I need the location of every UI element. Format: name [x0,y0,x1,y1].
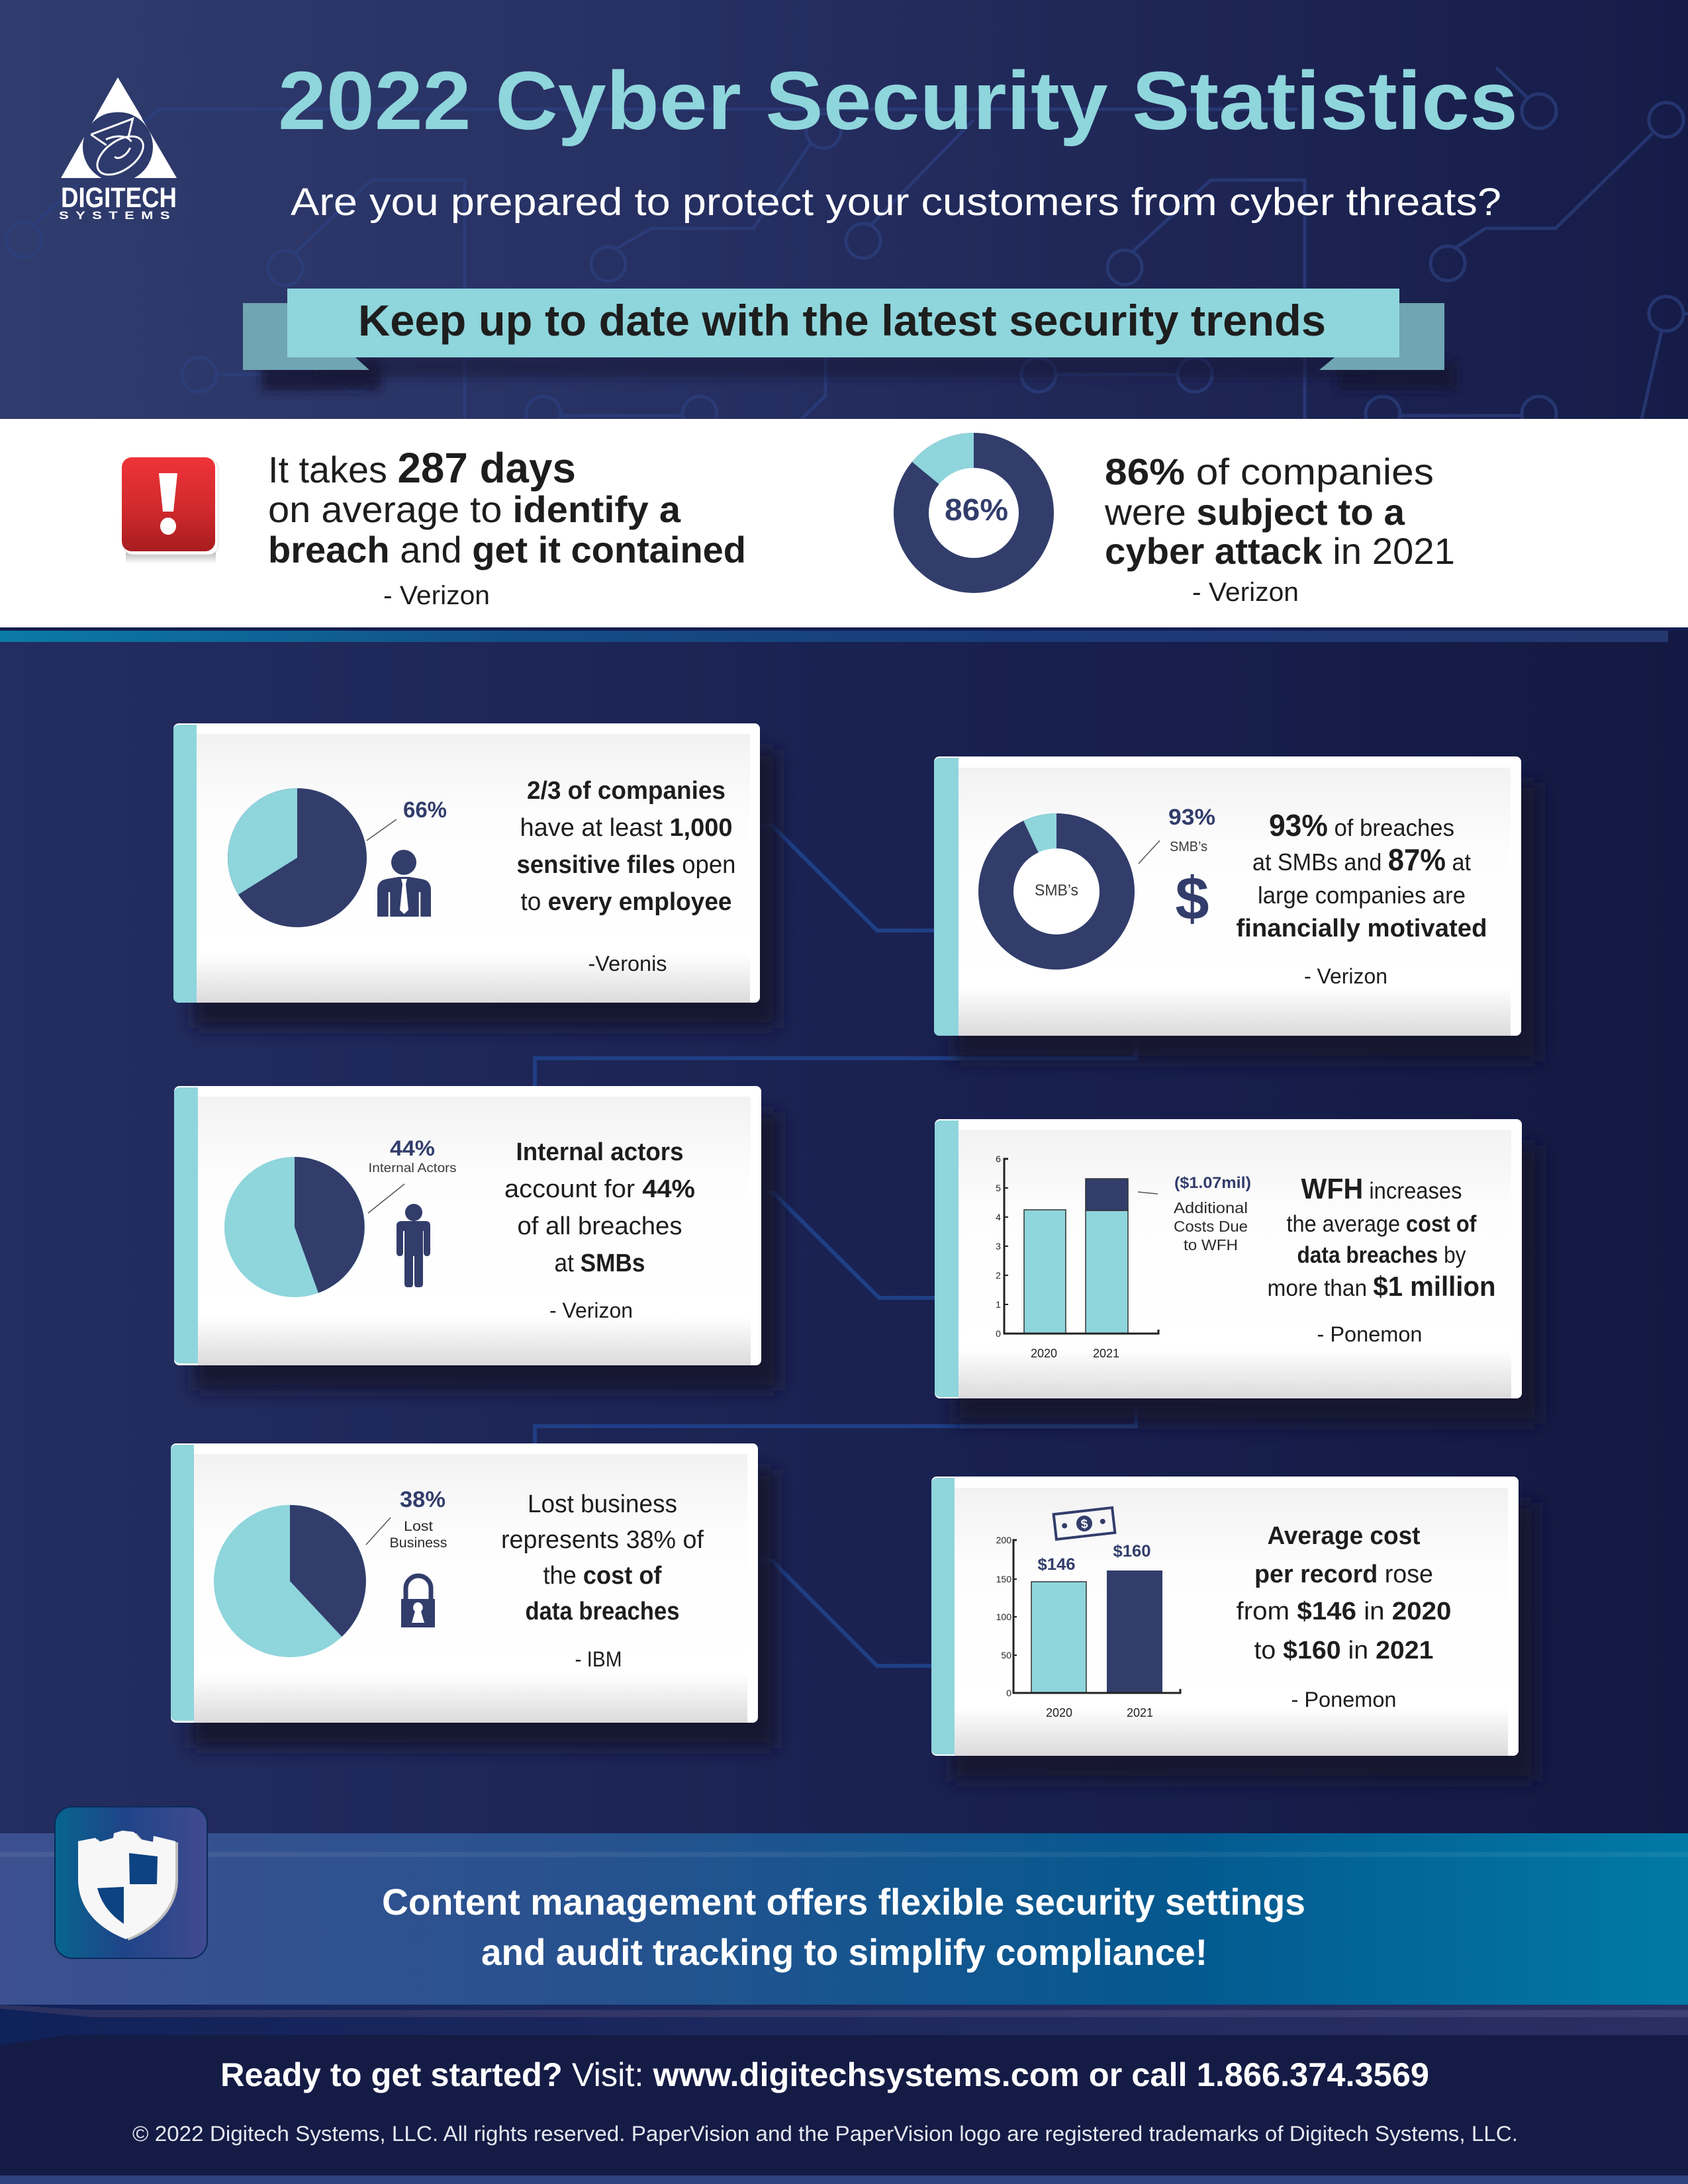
card text [1237,1522,1451,1711]
logo: Digitech Systems [59,77,177,222]
card text: data breaches [526,1598,679,1625]
stacked bar chart: WFH: 0 [996,1328,1001,1339]
card text: more than $1 million [1267,1271,1496,1302]
card text: from $146 in 2020 [1237,1598,1451,1625]
stat text: 287 days [268,444,746,610]
card text [1237,808,1487,988]
donut chart: SMBs 93% [978,805,1215,970]
card text: to every employee [520,888,732,916]
pie chart: 38%: 38% [400,1487,445,1512]
stacked bar chart: WFH: 6 [996,1154,1001,1164]
card text: the cost of [543,1562,662,1590]
stacked bar chart: WFH: 3 [996,1241,1001,1251]
chart callout: ($1.07mil) [1174,1174,1251,1192]
bar chart: cost per record: 50 [1001,1650,1011,1661]
icon: dollar bill: $ [1080,1517,1089,1532]
icon: padlock [401,1576,435,1627]
icon: dollar sign: $ [1175,865,1209,933]
card text [501,1490,704,1671]
panel: 93% of breaches [934,756,1540,1061]
band message: Content management offers flexible security settings [382,1881,1305,1923]
chart callout: to WFH [1184,1236,1238,1253]
card text: of all breaches [518,1212,682,1240]
pie chart: 44% [224,1136,457,1297]
panel: 2/3 of companies [173,723,778,1028]
chart callout: Additional [1174,1199,1248,1216]
white stats band [0,419,1688,627]
donut chart: 86% [894,433,1054,593]
card text: data breaches by [1297,1242,1466,1268]
stacked bar chart: WFH: 2 [996,1270,1001,1281]
chart callout [1174,1174,1251,1253]
ribbon banner [243,289,1456,390]
stat text: 86% of companies [1104,451,1455,607]
icon: red alert [122,457,218,564]
card text: account for 44% [504,1175,695,1203]
stat text: 287 days: It takes 287 days [268,444,576,492]
card text: at SMBs [555,1250,645,1277]
stat text: 287 days: on average to identify a [268,488,681,530]
card text: - Ponemon [1317,1322,1422,1346]
donut chart: 86%: 86% [945,492,1008,527]
stat text: 287 days: breach and get it contained [268,529,746,570]
logo: Digitech Systems: DIGITECH [61,182,177,214]
icon: dollar bill [1054,1508,1115,1539]
card text: 93% of breaches [1269,808,1454,842]
donut chart: SMBs 93%: SMB’s [1035,882,1078,899]
card text: - IBM [575,1647,622,1671]
card text: sensitive files open [516,851,736,879]
card text: - Verizon [1304,964,1387,988]
stat text: 86% of companies: were subject to a [1104,491,1405,533]
donut chart: SMBs 93%: 93% [1168,805,1215,830]
stat text: 287 days: - Verizon [383,581,490,610]
card text: represents 38% of [501,1526,704,1554]
bar chart: cost per record: 2021 [1127,1706,1153,1719]
pie chart: 38%: Business [389,1535,447,1551]
stacked bar chart: WFH: 4 [996,1212,1001,1222]
card text: to $160 in 2021 [1254,1637,1434,1664]
icon: person [397,1204,430,1287]
stacked bar chart: WFH: 2021 [1093,1347,1119,1360]
band message [382,1881,1305,1973]
panel: average cost per record [931,1477,1537,1781]
card text: at SMBs and 87% at [1252,842,1471,877]
card text [516,777,736,976]
pie chart: 66%: 66% [403,797,447,823]
card text: 2/3 of companies [527,777,726,805]
stat text: 86% of companies: - Verizon [1192,578,1299,607]
stacked bar chart: WFH: 2020 [1031,1347,1057,1360]
footer background [0,2005,1688,2184]
band message: and audit tracking to simplify compliance! [481,1931,1207,1973]
bar chart: cost per record: 200 [996,1535,1011,1545]
card text [504,1138,695,1322]
pie chart: 44%: 44% [390,1136,435,1160]
card text: per record rose [1254,1561,1433,1588]
bar chart: cost per record: 150 [996,1574,1011,1584]
card text: financially motivated [1237,915,1487,942]
pie chart: 38% [214,1487,447,1657]
card text: WFH increases [1301,1173,1462,1205]
icon: security shield tile [55,1807,207,1958]
title: 2022 Cyber Security Statistics [278,55,1518,147]
bar chart: cost per record: 100 [996,1612,1011,1622]
bar chart: cost per record [996,1535,1180,1719]
stacked bar chart: WFH [996,1154,1158,1360]
pie chart: 44%: Internal Actors [368,1161,457,1175]
card text: - Verizon [549,1298,633,1322]
stacked bar chart: WFH: 5 [996,1183,1001,1193]
pie chart: 66% [228,788,447,927]
chart callout: Costs Due [1174,1218,1248,1235]
stat text: 86% of companies: cyber attack in 2021 [1105,530,1455,572]
panel: internal actors [174,1086,780,1390]
card text: - Ponemon [1291,1688,1397,1711]
card text: the average cost of [1287,1211,1477,1237]
stat text: 86% of companies: 86% of companies [1105,451,1434,492]
donut chart: SMBs 93%: SMB’s [1170,839,1207,854]
copyright: © 2022 Digitech Systems, LLC. All rights reserved. PaperVision and the PaperVision logo are registered trademarks of Digitech Systems, LLC. [132,2122,1518,2146]
bar chart: cost per record: 2020 [1046,1706,1072,1719]
bar chart: cost per record: $146 [1038,1555,1075,1574]
panel: WFH cost [935,1119,1540,1424]
card text: Internal actors [516,1138,683,1166]
stacked bar chart: WFH: 1 [996,1299,1001,1310]
call to action: Ready to get started? Visit: www.digitechsystems.com or call 1.866.374.3569 [220,2056,1429,2093]
bar chart: cost per record: 0 [1006,1688,1011,1698]
pie chart: 38%: Lost [404,1519,433,1534]
ribbon text: Keep up to date with the latest security trends [358,296,1326,345]
subtitle: Are you prepared to protect your customers from cyber threats? [291,181,1501,224]
panel: lost business [171,1443,776,1748]
card text: large companies are [1258,882,1466,909]
card text: -Veronis [588,952,667,976]
card text: Average cost [1267,1522,1421,1550]
bar chart: cost per record: $160 [1113,1542,1150,1561]
callout band [0,1833,1688,2005]
card text [1267,1173,1496,1346]
icon: businessman [377,850,431,917]
logo: Digitech Systems: SYSTEMS [59,209,177,222]
card text: Lost business [528,1490,677,1518]
card text: have at least 1,000 [520,814,732,842]
circuit connectors between cards [535,825,1136,1666]
